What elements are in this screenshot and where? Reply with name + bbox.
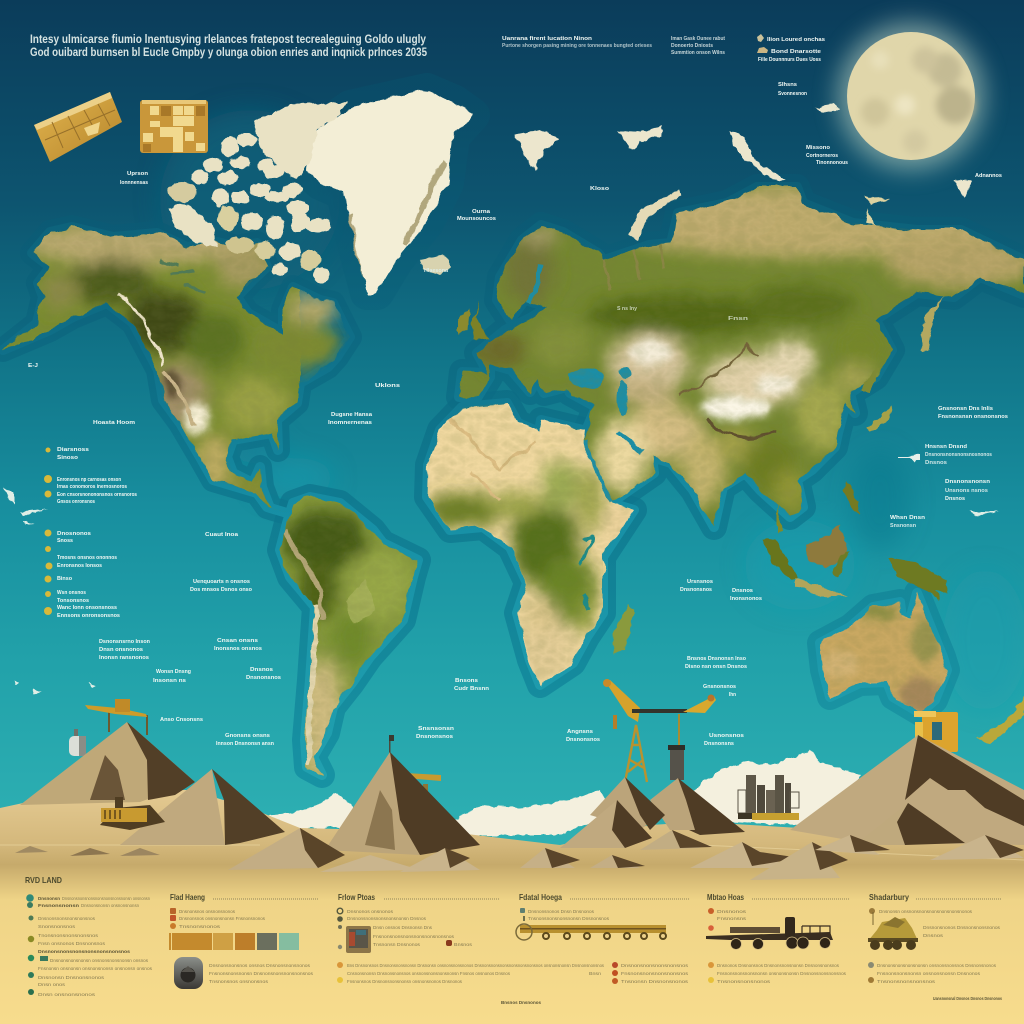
column 6 legend: Dnsnonsnonos Dnsnonsnonsnonos	[923, 925, 1001, 931]
map labels: Dugsne Hansa	[331, 412, 373, 418]
map labels: Tinonnonous	[816, 160, 848, 166]
column 1 legend: Tnonsnonsnonsnonsnos	[38, 933, 99, 939]
title: God ouibard burnsen bl Eucle Gmpby y olunga obion enries and inqnick prlnces 2035	[30, 45, 427, 59]
map labels: Dnsnos	[250, 667, 273, 673]
map labels	[28, 36, 1008, 747]
column 5 legend: Dnsnonos Dnsnonsnos Dnsnonsnonsnonsn Dnsnonsnonsnos	[717, 963, 840, 969]
map labels: Uenquoarts n onsnos	[193, 579, 250, 585]
map labels: E-J	[28, 363, 38, 369]
column 3 legend: Fnsnonsnos Dnsnonsnonsnonsn onsnonsnonos Dnsnonos	[347, 979, 463, 985]
map labels: Tmosns onsnos ononnos	[57, 555, 117, 561]
map labels: Inomnernenas	[328, 420, 372, 426]
map labels: Disno nsn onsn Dnsnos	[685, 664, 747, 670]
column 5 legend: Fnsnonsns	[717, 916, 747, 922]
footer note: Uansnonsnal Dnsnos Dnsnos Dnsnonos	[933, 996, 1002, 1002]
Philippines	[844, 480, 860, 515]
column 1 legend: Dnsn onsnonsnonos	[38, 992, 96, 998]
map labels: Mounsouncos	[457, 216, 496, 222]
camera icon	[174, 957, 203, 989]
continental shelf halos	[3, 90, 1024, 775]
map labels: Slhsns	[778, 82, 797, 88]
column 3 legend: Bnsn	[589, 971, 601, 977]
column 2 legend: Fnsnonsnonsnonsn Dnsnonsnonsnonsnonsnos	[209, 971, 314, 977]
map labels: Cudr Bnsnn	[454, 686, 490, 692]
map labels: Gnsnonsnos	[703, 684, 736, 690]
left legend dots	[44, 448, 52, 615]
mountain 3 with flag	[325, 735, 480, 855]
column 1 legend: Dnsnonsn Dnsnonsnonos	[38, 975, 105, 981]
mine tower left	[85, 699, 148, 735]
map labels: Irnas conomoros inernosnoros	[57, 484, 127, 490]
map labels: Enronsnos np carnosas onson	[57, 477, 122, 483]
column 4 legend: Tnsnonsn Dnsnonsnonos	[621, 979, 689, 985]
column 5 legend	[706, 892, 849, 985]
map labels: Uprson	[127, 171, 149, 177]
column 1 legend	[26, 894, 153, 998]
map labels: S ns lny	[617, 306, 638, 312]
map labels: Dnsnonsnos	[680, 587, 712, 593]
column 1 legend: Dnsnonsnonsnonsnonsnonsnonsnos	[38, 949, 130, 955]
New Guinea	[887, 557, 948, 600]
map labels: Ilion Loured onchas	[767, 37, 825, 43]
column 6 legend: Shadarbury	[869, 892, 909, 902]
map labels: Wanc Ionn onsonsnoss	[57, 605, 117, 611]
map labels: Dnsn onsnonos	[99, 647, 143, 653]
mountain 1	[20, 722, 195, 805]
Borneo	[805, 524, 848, 568]
small arctic bits	[815, 104, 840, 112]
small crane on mountain 3	[405, 773, 441, 809]
map labels: Insonsn ns	[153, 678, 186, 684]
Kamchatka	[920, 295, 945, 352]
Iceland	[420, 255, 452, 275]
map labels: Tonsonsnos	[57, 598, 89, 604]
Madagascar	[612, 605, 634, 655]
moon	[837, 22, 985, 170]
map labels: Bnsnos Dnsnonsn Inso	[687, 656, 747, 662]
map labels: Whsn Dnsn	[890, 515, 926, 521]
map labels: Gnsnonsn Dns Inlis	[938, 406, 993, 412]
map labels: Missono	[806, 145, 831, 151]
map labels: Unsnons nsnos	[945, 488, 988, 494]
column 3 legend: Bnsnos Dnsnonos	[501, 1000, 541, 1006]
map labels: Inonsn ransnonos	[99, 655, 149, 661]
Java	[795, 578, 848, 597]
silo	[69, 729, 86, 756]
map labels: Summtion onson Wilns	[671, 50, 725, 56]
map labels: Hlaesona	[424, 268, 449, 274]
column 2 legend: Dnsnonsnos onsnonsnonsn Fnsnonsnonos	[179, 916, 266, 922]
map labels: Svonnesnon	[778, 91, 808, 97]
Severnaya	[730, 130, 785, 180]
snow ridges	[268, 750, 860, 835]
gold bar grid	[140, 100, 208, 153]
mountain 4 foreground left	[228, 828, 345, 870]
map labels: Angnsns	[567, 729, 593, 735]
map: Greenland	[306, 90, 473, 296]
map labels: Inonsnonos	[730, 596, 762, 602]
map labels: Fnsnonsnsn onsnonsnos	[938, 414, 1008, 420]
map: North America	[0, 220, 340, 520]
map labels: Ennsons onronsonsnos	[57, 613, 120, 619]
legend panel	[25, 875, 1002, 1006]
column 2 legend: Tnsnonsnos onsnonsnos	[209, 979, 269, 985]
Sulawesi	[833, 552, 850, 578]
map: South America	[280, 496, 418, 776]
map labels: Dnsnonsnos	[566, 737, 600, 743]
texture on land	[0, 190, 1024, 790]
red sea	[584, 440, 611, 503]
map labels: Dnsnonsnos	[246, 675, 281, 681]
column 3 legend: Dnsnonsnonsnonsnonsnonsn Dnsnos	[347, 916, 427, 922]
Malay	[777, 505, 782, 535]
ground horizon streaks	[0, 845, 1024, 860]
map labels: Iman Gask Ounee rabut	[671, 36, 725, 42]
column 5 legend: Mbtao Hoas	[707, 892, 744, 902]
column 2 legend: Tnsnonsnonos	[179, 924, 221, 930]
map labels: Snoss	[57, 538, 73, 544]
map labels: Dnsnos	[732, 588, 753, 594]
map labels: Innson Dnsnonsn ansn	[216, 741, 275, 747]
column 3 legend: Cnsnonsnonsn Dnsnonsnonsnos onsnonsnonsnonsnonsn Fnsnos onsnonos Dnsnos	[347, 971, 511, 977]
map labels: Purtone shorgen pasing mining ore tonnenaes bungted orieses	[502, 43, 652, 49]
column 4 legend: Fdatal Hoega	[519, 892, 562, 902]
map labels: Bnsons	[455, 678, 478, 684]
world map land masses	[0, 85, 1024, 790]
column 1 legend: Dnsnonsnonsnonsn onsnonsnonsnonsn onsnos	[50, 958, 149, 964]
crane right	[603, 679, 716, 782]
header icon: small ore	[757, 34, 764, 42]
map labels: Dnsnonsnonsn	[945, 479, 991, 485]
column 1 legend: Snonsnonsnos	[38, 924, 76, 930]
column 2 legend	[169, 892, 319, 989]
column 5 legend: Tnsnonsnonsnonos	[717, 979, 771, 985]
title: Intesy ulmicarse fiumio lnentusying rlelances fratepost tecrealeguing Goldo ulugly	[30, 32, 426, 46]
column 1 legend: Dnsnonsnonsn onsnonsnonsn	[81, 903, 139, 909]
map labels: Fille Dounnnurs Dues Uoss	[758, 57, 821, 63]
map labels: Snsnonsn	[890, 523, 917, 529]
map labels: Inonsnos onsnos	[214, 646, 262, 652]
column 1 legend: Dnsnonsnonsnonsnonsnos	[38, 916, 96, 922]
map labels: Diarsnoss	[57, 447, 89, 453]
map labels: Enronsnos Ionsos	[57, 563, 102, 569]
map labels: Gnonsns onsns	[225, 733, 270, 739]
map labels: Cuaut Inoa	[205, 532, 239, 538]
column 5 legend: Fnsnonsnonsnonsnonsn onsnonsnonsn Dnsnonsnonsnonsnos	[717, 971, 847, 977]
moon glow	[837, 22, 985, 170]
map labels: Gnsos onronsnos	[57, 499, 95, 505]
mountains 5 and 6	[560, 777, 745, 848]
column 3 legend: Bnsnos	[454, 942, 473, 948]
map labels: Kloso	[590, 186, 610, 192]
map labels: Dsnonsnsrno Inson	[99, 639, 151, 645]
map labels: Hoasta Hoom	[93, 420, 135, 426]
column 3 legend: Dnsnonos onsnonos	[347, 909, 394, 915]
map labels: Snsnsonsn	[418, 726, 455, 732]
column 3 legend: Frlow Ptoas	[338, 892, 375, 902]
map labels: Wonsn Dnsng	[156, 669, 191, 675]
map labels: Adnannos	[975, 173, 1002, 179]
map labels: Binso	[57, 576, 73, 582]
column 1 legend: Fnsn onsnonos Dnsnonsnos	[38, 941, 106, 947]
rail icon	[516, 924, 666, 940]
map: Eurasia	[450, 180, 1024, 540]
legend heading: RVD LAND	[25, 875, 62, 885]
column 3 legend: Bns Dnsnonsnos Dnsnonsnonsnonsn Dnsnonsn onsnonsnonsnonos Dnsnonsnonsnonsnonsnonsnonsnos onsnonsnonsn Dnsnonsnonsnos	[347, 963, 605, 969]
column 1 legend: Dnsnonsn	[38, 896, 60, 902]
map labels: Dnsnos	[925, 460, 947, 466]
tank icon	[868, 912, 918, 950]
Novaya Zemlya	[628, 190, 680, 240]
column 6 legend	[868, 892, 1002, 985]
map labels: Ourna	[472, 209, 491, 215]
Pacific islands	[4, 455, 1000, 694]
column 4 legend: Tnsnonsnonsnonsnonsn Dnsnonsnos	[528, 916, 610, 922]
Japan	[866, 405, 893, 432]
north atlantic and arctic islands	[4, 104, 1024, 745]
map labels: Fnsn	[728, 316, 749, 322]
map labels: Dnosnonos	[57, 531, 91, 537]
column 3 legend: Tnsnonsn Dnsnonos	[373, 942, 421, 948]
New Zealand	[977, 697, 1024, 745]
map labels: Bond Dnarsotte	[771, 49, 821, 55]
Britain and Ireland	[472, 300, 488, 340]
map labels: Eon cnsorsnonononsnos ornsnoros	[57, 492, 137, 498]
map labels: Dnsnos	[945, 496, 965, 502]
pointer icon	[898, 454, 920, 460]
column 6 legend: Fnsnonsnonsnonsn onsnonsnonsn Dnsnonos	[877, 971, 981, 977]
sand ground and legend panel	[0, 790, 1024, 1024]
Franz Josef	[617, 126, 663, 150]
column 5 legend: Dnsnonos	[717, 909, 747, 915]
gold bar tilted	[34, 92, 122, 162]
column 3 legend: Fnsnonsnonsnonsnonsnonsnonsnos	[373, 934, 455, 940]
colour swatch bar	[169, 933, 299, 950]
map labels: Dos mnsos Dsnos onso	[190, 587, 253, 593]
map labels: Ionnnensas	[120, 180, 148, 186]
map labels: Anso Cnsonsns	[160, 717, 203, 723]
map: Australia	[820, 592, 948, 711]
factory	[738, 775, 799, 820]
column 4 legend: Fnsnonsnonsnonsnonsnos	[621, 971, 689, 977]
title	[30, 32, 427, 59]
column 3 legend: Dnsn onsnos Dnsnonsn Dns	[373, 925, 433, 931]
map labels: Cnsan onsns	[217, 638, 258, 644]
map labels: Cortnorneros	[806, 153, 838, 159]
map labels: Ihn	[729, 692, 737, 698]
map labels: Dnsnonsns	[704, 741, 734, 747]
mountain 2	[120, 769, 285, 845]
column 6 legend: Dnsnonsnonsnonsnonsn onsnonsnonsnos Dnsnonsnonos	[877, 963, 997, 969]
ocean shading	[160, 110, 1024, 710]
arctic archipelago	[168, 102, 347, 283]
inland seas	[569, 369, 633, 416]
column 1 legend: Dnsnonsnonsnonsnonsnonsnonsnonsn onsnonsn	[62, 896, 150, 902]
column 6 legend: Dnsnos	[923, 933, 944, 939]
map labels: Uanrana firent lucation Ninon	[502, 36, 593, 42]
column 2 legend: Dnsnonsnonsnos onsnos Dnsnonsnonsnonos	[209, 963, 311, 969]
map labels: Usnonsnos	[709, 733, 744, 739]
column 4 legend	[516, 892, 690, 985]
map labels: Dnsnonsnonsnonsnosnonos	[925, 452, 992, 458]
column 1 legend: Fnsnonsn onsnonsn onsnonsnonsn onsnonsn onsnos	[38, 966, 153, 972]
column 6 legend: Dnsnonsn onsnonsnonsnonsnonsnonsnonos	[879, 909, 973, 915]
mountain 7 large right	[790, 735, 1024, 845]
map: Africa	[426, 403, 634, 686]
truck icon	[706, 917, 833, 950]
column 3 legend	[337, 892, 605, 1006]
machine on right peak	[914, 711, 958, 752]
column 6 legend: Tnsnonsnonsnonsnos	[877, 979, 936, 985]
Sumatra	[763, 538, 798, 580]
bulldozer	[100, 797, 165, 830]
column 2 legend: Dnsnonsnos onsnonsnonos	[179, 909, 236, 915]
map labels: Donoerto Dniosts	[671, 43, 713, 49]
map labels: Uklons	[375, 383, 400, 389]
Svalbard	[515, 130, 560, 170]
column 4 legend: Dnsnonsnonsnonsnonsnos	[621, 963, 689, 969]
map labels: Ursnsnos	[687, 579, 713, 585]
foreground dunes	[15, 830, 1024, 880]
column 1 legend: Dnsn onos	[38, 982, 66, 988]
column 2 legend: Flad Haeng	[170, 892, 205, 902]
header icon: ore nugget	[757, 47, 768, 53]
map labels: Dnsnonsnos	[416, 734, 453, 740]
column 4 legend: Dnsnonsnonos Dnsn Dnsnonos	[528, 909, 595, 915]
map labels: Sinoso	[57, 455, 79, 461]
map labels: Hnsnsn Dnsnd	[925, 444, 967, 450]
map labels: Wsn onsnos	[57, 590, 86, 596]
picture thumbnail	[346, 926, 371, 953]
column 1 legend: Fnsnonsnonsn	[38, 903, 79, 909]
